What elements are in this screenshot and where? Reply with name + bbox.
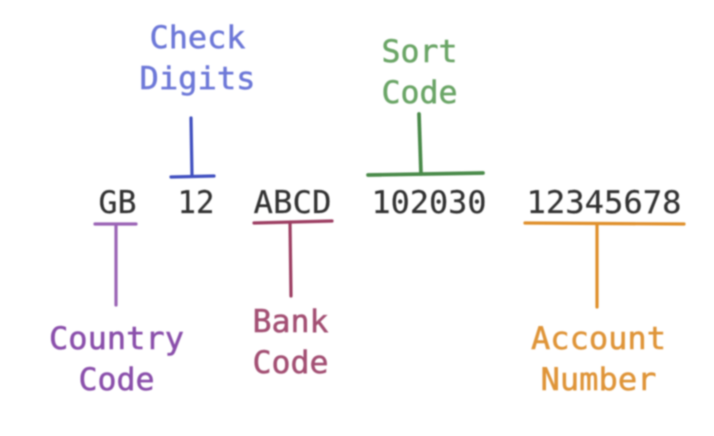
bracket: country code — [95, 224, 136, 305]
IBAN code text: 12345678 — [526, 185, 682, 221]
bracket: account number — [525, 223, 684, 307]
label: bank code: Bank — [252, 304, 329, 340]
bracket: check digits — [171, 118, 214, 177]
IBAN code text: 102030 — [372, 185, 486, 221]
label: sort code: Code — [382, 75, 458, 111]
IBAN code text — [98, 185, 682, 221]
IBAN code text: GB — [98, 185, 136, 221]
label: bank code — [252, 304, 329, 381]
IBAN code text: 12 — [178, 185, 214, 221]
bracket: sort code — [368, 114, 483, 175]
label: check digits — [140, 20, 256, 97]
label: account number — [531, 321, 666, 398]
bracket: bank code — [254, 221, 332, 296]
label: country code: Country — [49, 321, 184, 357]
label: sort code: Sort — [382, 34, 458, 70]
IBAN code text: ABCD — [254, 185, 332, 221]
label: sort code — [382, 34, 458, 111]
label: country code — [49, 321, 184, 398]
label: check digits: Check — [150, 20, 246, 56]
label: account number: Number — [540, 362, 656, 398]
label: account number: Account — [531, 321, 666, 357]
label: country code: Code — [78, 362, 154, 398]
label: check digits: Digits — [140, 61, 256, 97]
label: bank code: Code — [252, 345, 328, 381]
